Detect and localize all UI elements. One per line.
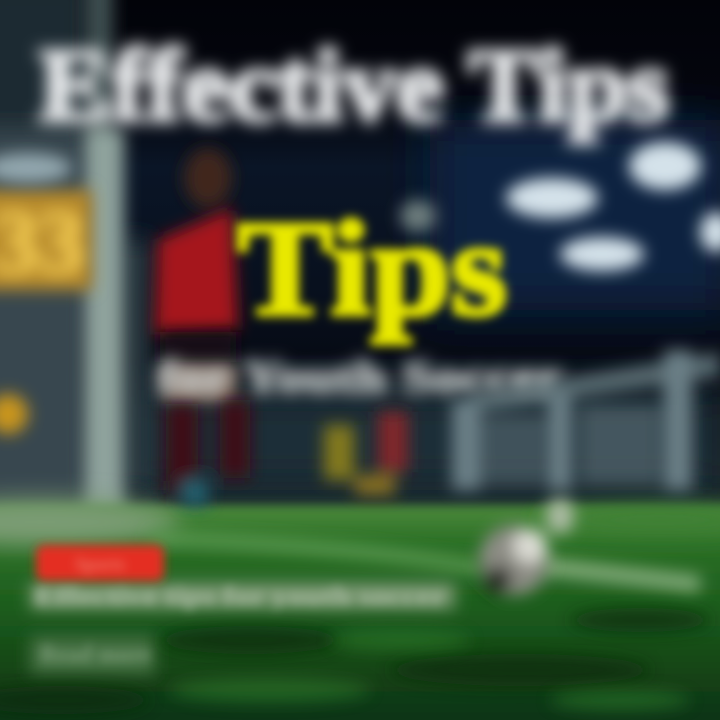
red button — [36, 545, 164, 581]
distant players — [324, 412, 408, 495]
player head — [184, 148, 232, 208]
background: night sky — [0, 0, 720, 520]
background: goal net left — [0, 0, 150, 510]
author: Read more — [40, 642, 150, 668]
goal post — [84, 0, 124, 525]
subtitle: for Youth Soccer — [158, 351, 562, 402]
player thigh — [164, 364, 236, 402]
floating stadium lights — [400, 142, 720, 271]
football pitch — [0, 498, 720, 720]
player socks — [166, 400, 250, 506]
player red shirt — [155, 208, 238, 335]
heading: Tips yellow: Tips — [237, 194, 507, 344]
caption: Effective tips for youth soccer — [35, 584, 445, 610]
goal frame right — [452, 350, 720, 490]
player shorts — [160, 332, 236, 362]
left coin — [0, 394, 28, 434]
red button: Sports — [75, 554, 125, 574]
soccer ball — [479, 498, 574, 595]
player — [155, 148, 250, 506]
left label — [0, 153, 72, 183]
heading: Effective Tips: Effective Tips — [39, 28, 669, 143]
